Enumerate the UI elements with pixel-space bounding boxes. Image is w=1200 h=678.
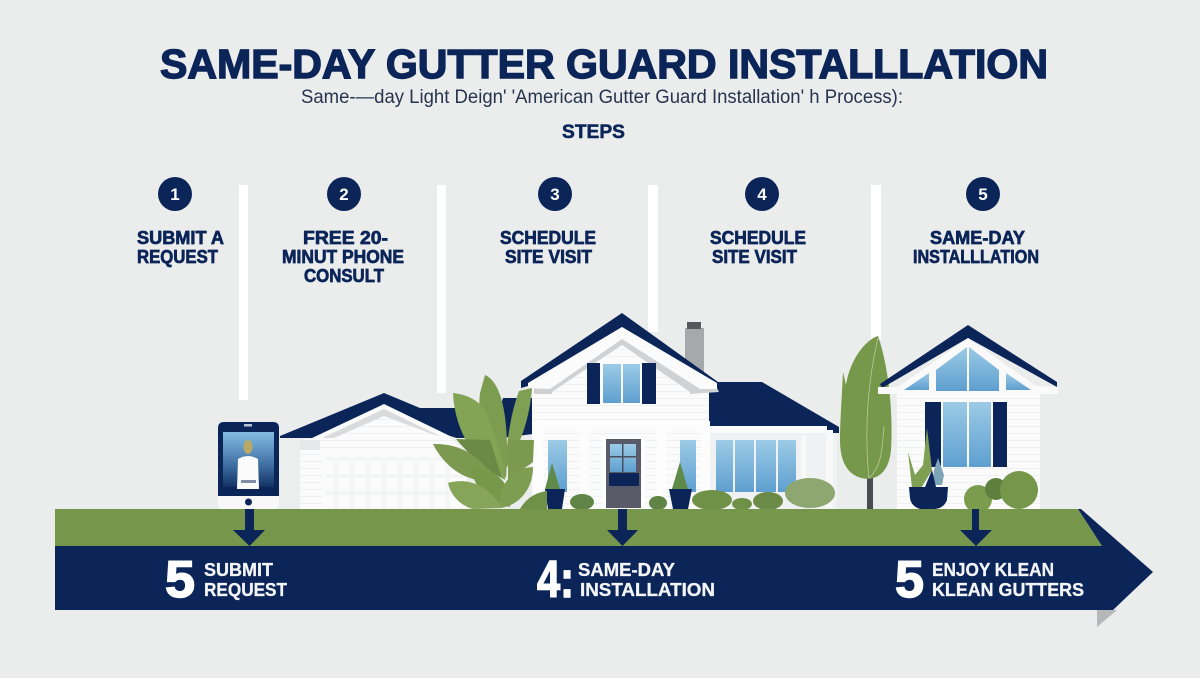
porch [533,421,710,509]
right house [878,325,1058,513]
plant [433,375,547,509]
main body [532,380,709,509]
step 5: 5 [978,185,988,204]
garage house [280,393,533,509]
step 1: 1 [170,185,180,204]
phone [218,422,279,509]
right wing [709,382,839,509]
step 2 [282,177,404,286]
banner item: same-day installation: SAME-DAY [578,559,676,580]
steps heading: STEPS [562,122,625,143]
banner item: submit request [165,551,288,609]
gable windows [904,347,1031,391]
tree [840,336,892,509]
front door [602,436,645,509]
step 5 [913,177,1039,267]
left planter [545,463,565,509]
green lawn [55,509,1102,546]
bushes [570,478,835,510]
banner item: submit request: 5 [165,551,195,609]
step 4: 4 [757,185,767,204]
planter with plants [908,428,948,509]
arrow down 2 [607,509,638,546]
banner item: submit request: SUBMIT [204,559,274,580]
banner fold shadow [1097,610,1117,627]
step 4 [710,177,806,267]
step 1: REQUEST [137,247,218,267]
step 3: 3 [550,185,560,204]
right planter [669,462,692,509]
step 3: SITE VISIT [505,247,592,267]
subtitle: Same-—day Light Deign' 'American Gutter Guard Installation' h Process): [301,87,903,108]
banner item: same-day installation: INSTALLATION [580,579,715,600]
step 2: CONSULT [304,266,384,286]
step 3: SCHEDULE [500,228,596,248]
upper window [587,362,656,405]
step 1 [137,177,224,267]
banner item: same-day installation: 4: [537,551,574,609]
person [237,440,259,489]
gable roof [521,313,718,388]
step 3 [500,177,596,267]
chimney [685,322,704,372]
step 4: SCHEDULE [710,228,806,248]
step 5: INSTALLLATION [913,247,1039,267]
white vertical connector lines [239,185,881,400]
banner item: same-day installation [537,551,715,609]
title: SAME-DAY GUTTER GUARD INSTALLLATION [160,41,1048,87]
arrow down 3 [960,509,992,546]
main house [521,313,839,510]
step 2: 2 [339,185,349,204]
banner item: submit request: REQUEST [204,579,288,600]
banner item: enjoy klean gutters: 5 [895,551,924,609]
navy arrow banner [55,509,1153,610]
step 5: SAME-DAY [930,228,1025,248]
step 1: SUBMIT A [137,228,224,248]
banner item: enjoy klean gutters: ENJOY KLEAN [932,559,1054,580]
lower window [925,402,1007,467]
step 2: FREE 20- [303,228,388,248]
step 2: MINUT PHONE [282,247,404,267]
step 4: SITE VISIT [712,247,797,267]
banner item: enjoy klean gutters: KLEAN GUTTERS [932,579,1084,600]
shrubs [964,471,1038,513]
banner item: enjoy klean gutters [895,551,1084,609]
arrow down 1 [233,509,265,546]
